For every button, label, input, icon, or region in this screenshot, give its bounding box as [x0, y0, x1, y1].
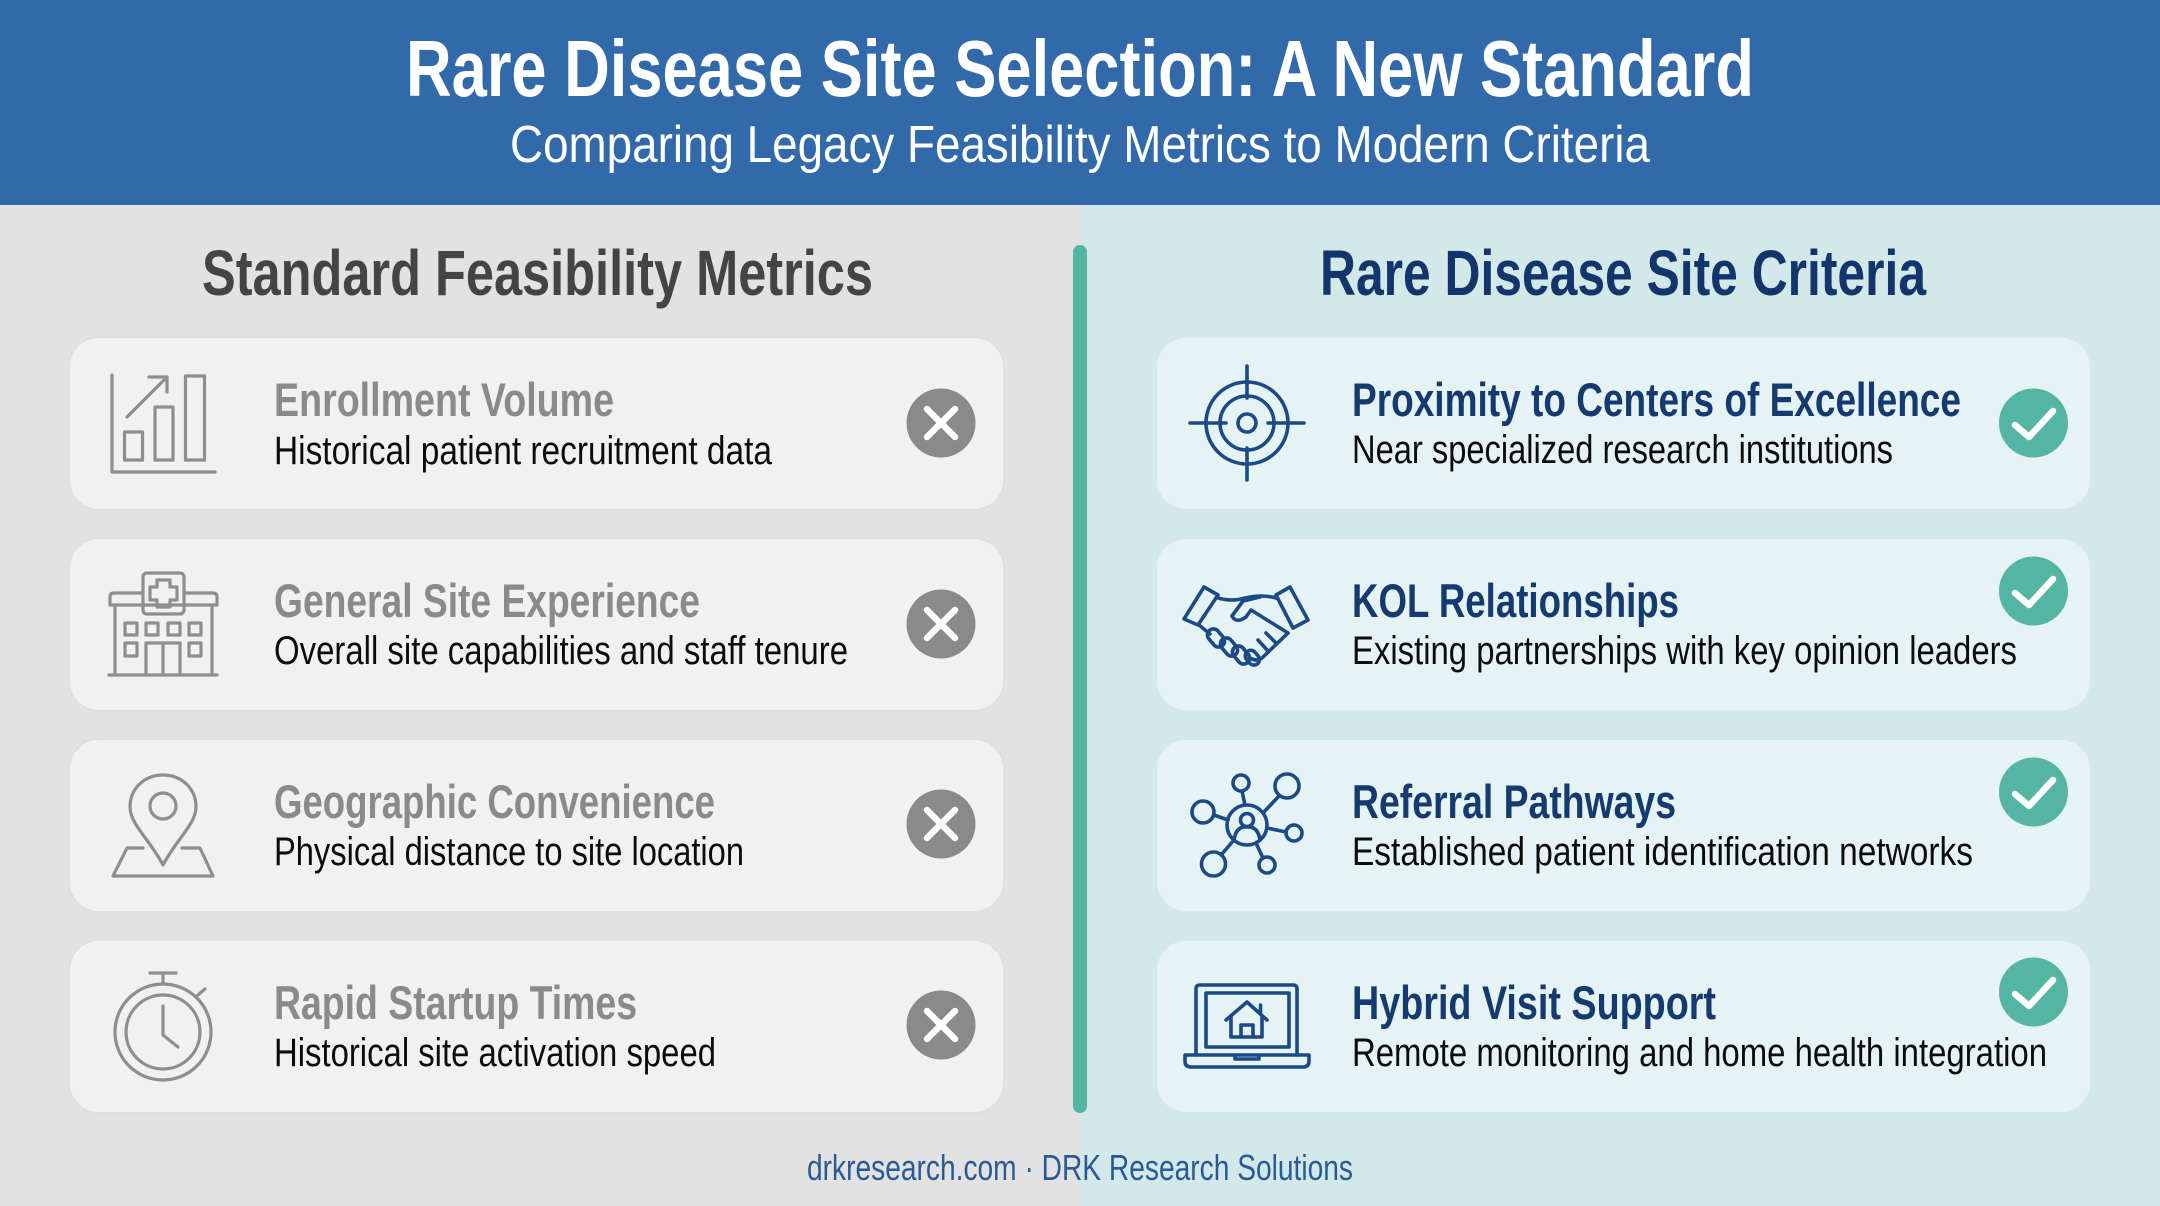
card: kol relationships — [1156, 538, 2091, 711]
card: referral pathways — [1156, 739, 2091, 912]
icon: x mark — [906, 990, 976, 1060]
header banner — [0, 0, 2160, 205]
heading: rare disease site criteria: Rare Disease Site Criteria — [1320, 237, 1926, 309]
title: Rare Disease Site Selection: A New Standard — [406, 24, 1754, 113]
icon: check mark — [1999, 958, 2068, 1026]
card title: Proximity to Centers of Excellence — [1352, 373, 1961, 426]
card title: General Site Experience — [274, 574, 700, 627]
icon: x mark — [906, 590, 976, 658]
card: hybrid visit support — [1156, 940, 2091, 1113]
footer: drkresearch.com · DRK Research Solutions — [807, 1147, 1353, 1188]
icon: network — [1192, 774, 1302, 876]
card description: Established patient identification networks — [1352, 830, 1973, 874]
icon: x mark — [906, 790, 976, 858]
card description: Physical distance to site location — [274, 830, 744, 874]
icon: laptop with house — [1185, 985, 1309, 1067]
subtitle: Comparing Legacy Feasibility Metrics to Modern Criteria — [510, 116, 1650, 174]
card description: Existing partnerships with key opinion leaders — [1352, 629, 2017, 673]
card: geographic convenience — [69, 739, 1004, 912]
icon: hospital — [109, 573, 217, 675]
icon: target — [1190, 366, 1304, 480]
card description: Near specialized research institutions — [1352, 428, 1893, 472]
card title: Enrollment Volume — [274, 373, 614, 426]
card: rapid startup times — [69, 940, 1004, 1113]
card title: Rapid Startup Times — [274, 976, 637, 1029]
center divider — [1073, 245, 1087, 1113]
icon: bar chart — [112, 375, 215, 472]
icon: check mark — [1999, 758, 2068, 826]
card description: Historical patient recruitment data — [274, 429, 773, 473]
card description: Historical site activation speed — [274, 1031, 716, 1075]
card description: Overall site capabilities and staff tenure — [274, 629, 848, 673]
card: general site experience — [69, 538, 1004, 711]
card: proximity to centers of excellence — [1156, 337, 2091, 510]
card: enrollment volume — [69, 337, 1004, 510]
icon: check mark — [1999, 556, 2068, 626]
card title: KOL Relationships — [1352, 574, 1679, 627]
heading: standard feasibility metrics: Standard Feasibility Metrics — [202, 237, 873, 309]
card title: Geographic Convenience — [274, 775, 715, 828]
icon: map pin — [113, 775, 213, 876]
icon: stopwatch — [115, 973, 211, 1080]
icon: handshake — [1184, 587, 1308, 667]
icon: x mark — [906, 388, 976, 458]
card title: Referral Pathways — [1352, 775, 1676, 828]
card title: Hybrid Visit Support — [1352, 976, 1716, 1029]
icon: check mark — [1999, 388, 2068, 458]
